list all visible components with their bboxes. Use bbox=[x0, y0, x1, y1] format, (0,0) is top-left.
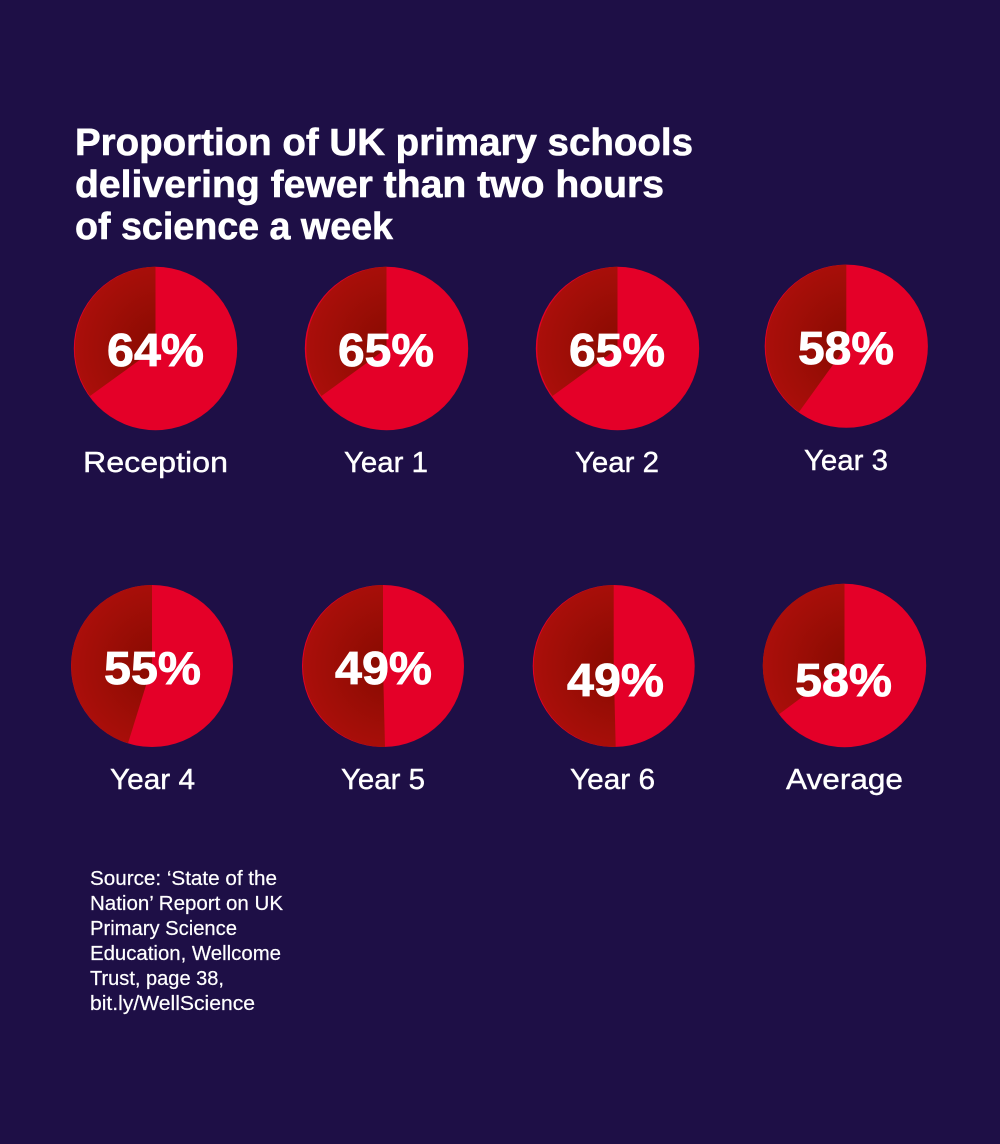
pie chart: Reception 64% bbox=[74, 267, 237, 479]
source note: Source: ‘State of the bbox=[90, 868, 277, 890]
pie chart: Year 4 55%: Year 4 bbox=[110, 764, 195, 796]
source note bbox=[90, 868, 284, 1015]
pie chart: Year 4 55% bbox=[71, 585, 233, 796]
pie chart: Year 1 65%: Year 1 bbox=[344, 447, 428, 479]
source note: Nation’ Report on UK bbox=[90, 893, 284, 915]
pie chart: Year 6 49% bbox=[533, 585, 695, 796]
title: of science a week bbox=[75, 206, 394, 248]
pie chart: Year 1 65% bbox=[305, 267, 468, 479]
pie chart: Year 5 49% bbox=[302, 585, 464, 796]
pie chart: Year 2 65%: Year 2 bbox=[575, 447, 659, 479]
source note: Education, Wellcome bbox=[90, 943, 281, 965]
pie chart: Average 58%: Average bbox=[786, 764, 903, 796]
pie chart: Year 4 55%: 55% bbox=[104, 642, 201, 694]
pie chart: Year 1 65%: 65% bbox=[338, 324, 434, 376]
title bbox=[75, 122, 693, 248]
title: Proportion of UK primary schools bbox=[75, 122, 693, 164]
pie chart: Year 3 58% bbox=[765, 265, 928, 477]
pie chart: Reception 64%: 64% bbox=[107, 324, 204, 376]
pie chart: Year 6 49%: 49% bbox=[567, 654, 664, 706]
pie chart: Year 3 58%: Year 3 bbox=[804, 445, 888, 477]
pie chart: Year 2 65% bbox=[536, 267, 699, 479]
source note: Trust, page 38, bbox=[90, 968, 224, 990]
pie chart: Year 5 49%: 49% bbox=[335, 642, 432, 694]
title: delivering fewer than two hours bbox=[75, 164, 664, 206]
pie chart: Reception 64%: Reception bbox=[83, 447, 228, 479]
source note: Primary Science bbox=[90, 918, 237, 940]
pie chart: Year 3 58%: 58% bbox=[798, 322, 894, 374]
pie chart: Year 2 65%: 65% bbox=[569, 324, 665, 376]
pie chart: Average 58%: 58% bbox=[795, 654, 892, 706]
pie chart: Year 5 49%: Year 5 bbox=[341, 764, 425, 796]
source note: bit.ly/WellScience bbox=[90, 993, 255, 1015]
pie chart: Average 58% bbox=[763, 584, 926, 796]
pie chart: Year 6 49%: Year 6 bbox=[570, 764, 655, 796]
